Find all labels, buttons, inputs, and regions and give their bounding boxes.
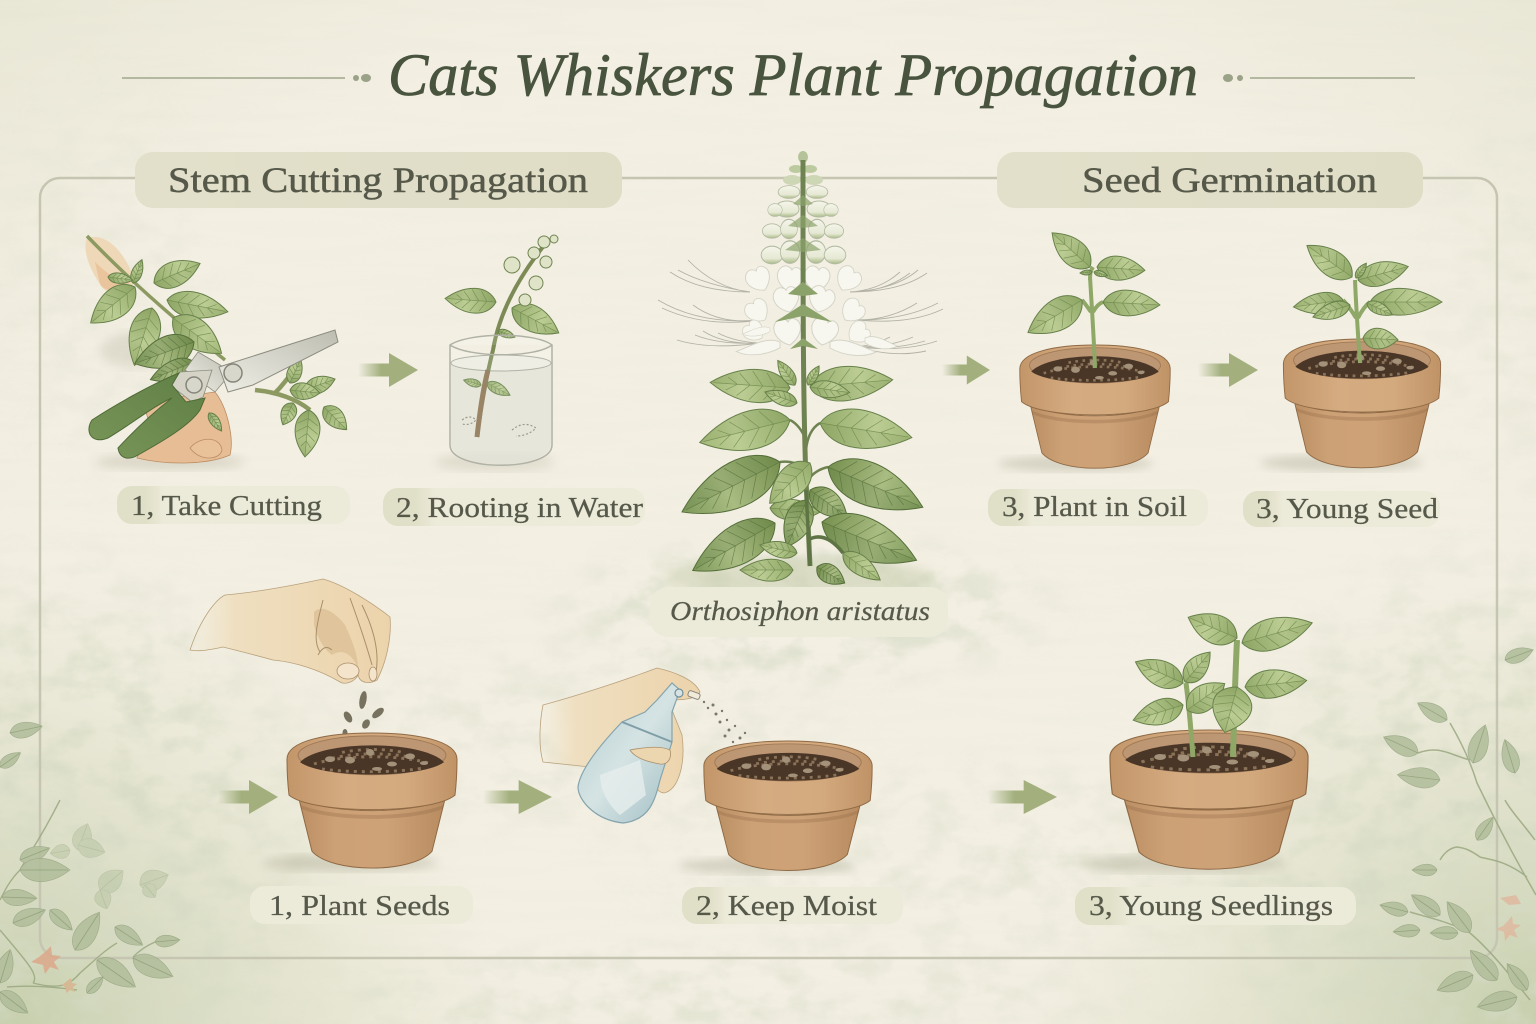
arrow: plant to soil	[942, 356, 990, 384]
label: 1, Take Cutting	[117, 486, 350, 524]
roots	[462, 417, 536, 436]
title ornament right	[1223, 74, 1415, 82]
heading: Seed Germination	[997, 152, 1423, 208]
label: 1, Take Cutting: 1, Take Cutting	[131, 491, 322, 522]
glass outline	[450, 335, 552, 465]
label: 3, Young Seedlings: 3, Young Seedlings	[1089, 891, 1333, 922]
illustration: hand with spray bottle	[540, 668, 746, 823]
arrow: seed pot to spray	[483, 780, 552, 814]
illustration: young seed plant	[1260, 235, 1442, 471]
illustration: young seedlings in pot	[1081, 604, 1316, 873]
title	[122, 42, 1415, 108]
corner foliage: bottom right	[1378, 643, 1536, 1016]
label: 3, Young Seed: 3, Young Seed	[1256, 494, 1438, 525]
central plant: Orthosiphon aristatus	[658, 151, 943, 598]
hand	[190, 579, 390, 683]
arrow: into seed pot	[218, 780, 278, 814]
main stem	[803, 160, 810, 566]
calyx greens	[775, 195, 832, 349]
label: 2, Rooting in Water: 2, Rooting in Water	[396, 493, 644, 524]
label: 2, Keep Moist: 2, Keep Moist	[696, 891, 877, 922]
heading: Seed Germination: Seed Germination	[1082, 160, 1377, 200]
label: Orthosiphon aristatus: Orthosiphon aristatus	[670, 596, 930, 626]
label: 1, Plant Seeds	[250, 886, 473, 924]
severed cutting	[255, 356, 353, 458]
illustration: seed pot	[262, 733, 457, 872]
thumb	[190, 439, 222, 458]
corner foliage: bottom left	[0, 719, 180, 1020]
bottle	[578, 683, 701, 823]
heading: Stem Cutting Propagation: Stem Cutting Propagation	[168, 160, 588, 200]
falling seeds	[342, 691, 386, 741]
flower whiskers	[658, 260, 943, 354]
illustration: hand dropping seeds	[190, 579, 390, 741]
label: 2, Rooting in Water	[383, 488, 645, 526]
title: Cats Whiskers Plant Propagation	[388, 42, 1198, 108]
upper hand	[85, 237, 135, 293]
illustration: plant in soil	[998, 224, 1170, 472]
label: 1, Plant Seeds: 1, Plant Seeds	[269, 891, 450, 922]
label: 3, Young Seedlings	[1075, 887, 1356, 925]
stem and leaves	[444, 243, 565, 437]
upper leaves	[695, 357, 915, 480]
shears blades	[170, 330, 338, 402]
seedling	[1292, 235, 1442, 363]
thumb	[630, 747, 671, 764]
flower spike buds	[761, 151, 846, 264]
lower hand	[137, 392, 231, 463]
illustration: cutting rooting in a glass of water	[435, 235, 565, 471]
fingernails	[337, 663, 359, 679]
illustration: moist pot	[679, 741, 872, 874]
heading: Stem Cutting Propagation	[135, 152, 622, 208]
shears green handles	[89, 373, 205, 458]
label: 2, Keep Moist	[682, 887, 903, 924]
lower leaves	[672, 442, 931, 591]
arrow: moist pot to seedlings	[988, 780, 1057, 814]
stem and leaves	[82, 236, 230, 434]
left seedling	[1130, 645, 1232, 757]
label: 3, Plant in Soil: 3, Plant in Soil	[1002, 492, 1187, 523]
white flowers	[736, 262, 897, 355]
arrow: cutting to water	[358, 353, 418, 387]
arrow: soil to young seed	[1198, 353, 1258, 387]
flower buds	[504, 235, 558, 306]
spray droplets	[703, 701, 746, 743]
label: 3, Plant in Soil	[988, 489, 1208, 526]
glass water	[451, 356, 551, 464]
outer frame	[40, 178, 1497, 958]
title ornament left	[122, 74, 371, 82]
right seedling	[1182, 604, 1316, 757]
finger crease shadow	[314, 609, 358, 668]
hand behind bottle	[540, 668, 700, 793]
seedling	[1020, 224, 1161, 368]
illustration: hand with pruning shears cutting a stem	[82, 236, 353, 470]
label: Orthosiphon aristatus	[650, 587, 948, 637]
